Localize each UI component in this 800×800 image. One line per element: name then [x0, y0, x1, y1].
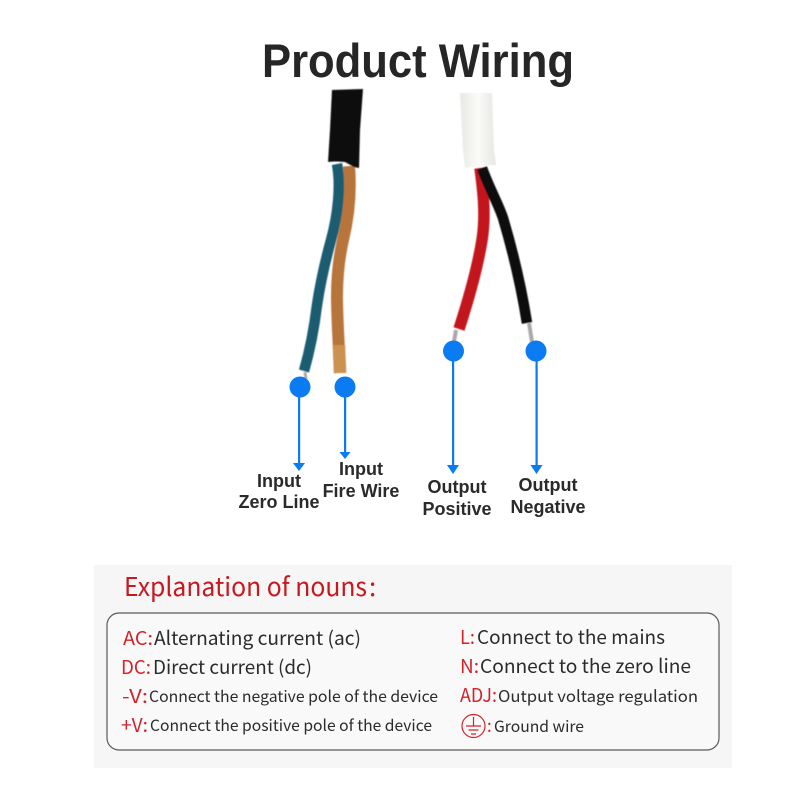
- black sleeve: [328, 89, 363, 168]
- input cable photo: [304, 89, 363, 379]
- definition: +V: Connect the positive pole of the device: [150, 714, 432, 736]
- panel heading: :: [369, 567, 376, 604]
- definition: -V: Connect the negative pole of the device: [149, 685, 438, 707]
- black negative wire: [482, 168, 532, 342]
- label: output negative: Output: [519, 475, 577, 495]
- definition: +V: +V:: [121, 711, 148, 738]
- connector: input zero line: [290, 376, 310, 471]
- label: input fire wire: Input: [339, 459, 383, 479]
- definition: ground wire: Ground wire: [494, 715, 584, 737]
- label: input fire wire: Fire Wire: [323, 481, 399, 501]
- definition: ADJ: Output voltage regulation: [498, 683, 698, 707]
- panel heading: Explanation of nouns: [124, 567, 367, 604]
- title: Product Wiring: [262, 34, 574, 87]
- definition: -V: -V:: [122, 682, 148, 709]
- definition: AC: Alternating current (ac): [154, 624, 361, 651]
- definition: DC: DC:: [121, 653, 151, 680]
- definition: DC: Direct current (dc): [153, 653, 312, 680]
- label: input zero line: Zero Line: [238, 492, 320, 512]
- label: output negative: Negative: [510, 497, 586, 517]
- label: input zero line: Input: [257, 471, 301, 491]
- definition: ground wire: [462, 712, 584, 738]
- label: output positive: Output: [428, 477, 486, 497]
- definition: L: Connect to the mains: [477, 623, 665, 650]
- connector: output negative: [526, 340, 546, 474]
- white sleeve: [460, 93, 496, 168]
- definition: N: N:: [460, 652, 479, 679]
- brown fire wire: [337, 166, 350, 373]
- label: output positive: Positive: [422, 499, 492, 519]
- definitions box: [107, 613, 719, 750]
- definition: ADJ: ADJ:: [460, 681, 497, 708]
- definition: AC: AC:: [123, 624, 153, 651]
- connector: input fire wire: [334, 376, 356, 459]
- definition: ground wire: :: [487, 712, 492, 737]
- definition: N: Connect to the zero line: [480, 652, 691, 679]
- panel: explanation of nouns: [94, 565, 732, 768]
- definition: L: L:: [460, 623, 475, 650]
- red positive wire: [454, 168, 484, 342]
- output cable photo: [454, 93, 532, 342]
- icon: ground symbol: [462, 714, 485, 738]
- blue zero line wire: [304, 164, 339, 379]
- connector: output positive: [443, 340, 464, 474]
